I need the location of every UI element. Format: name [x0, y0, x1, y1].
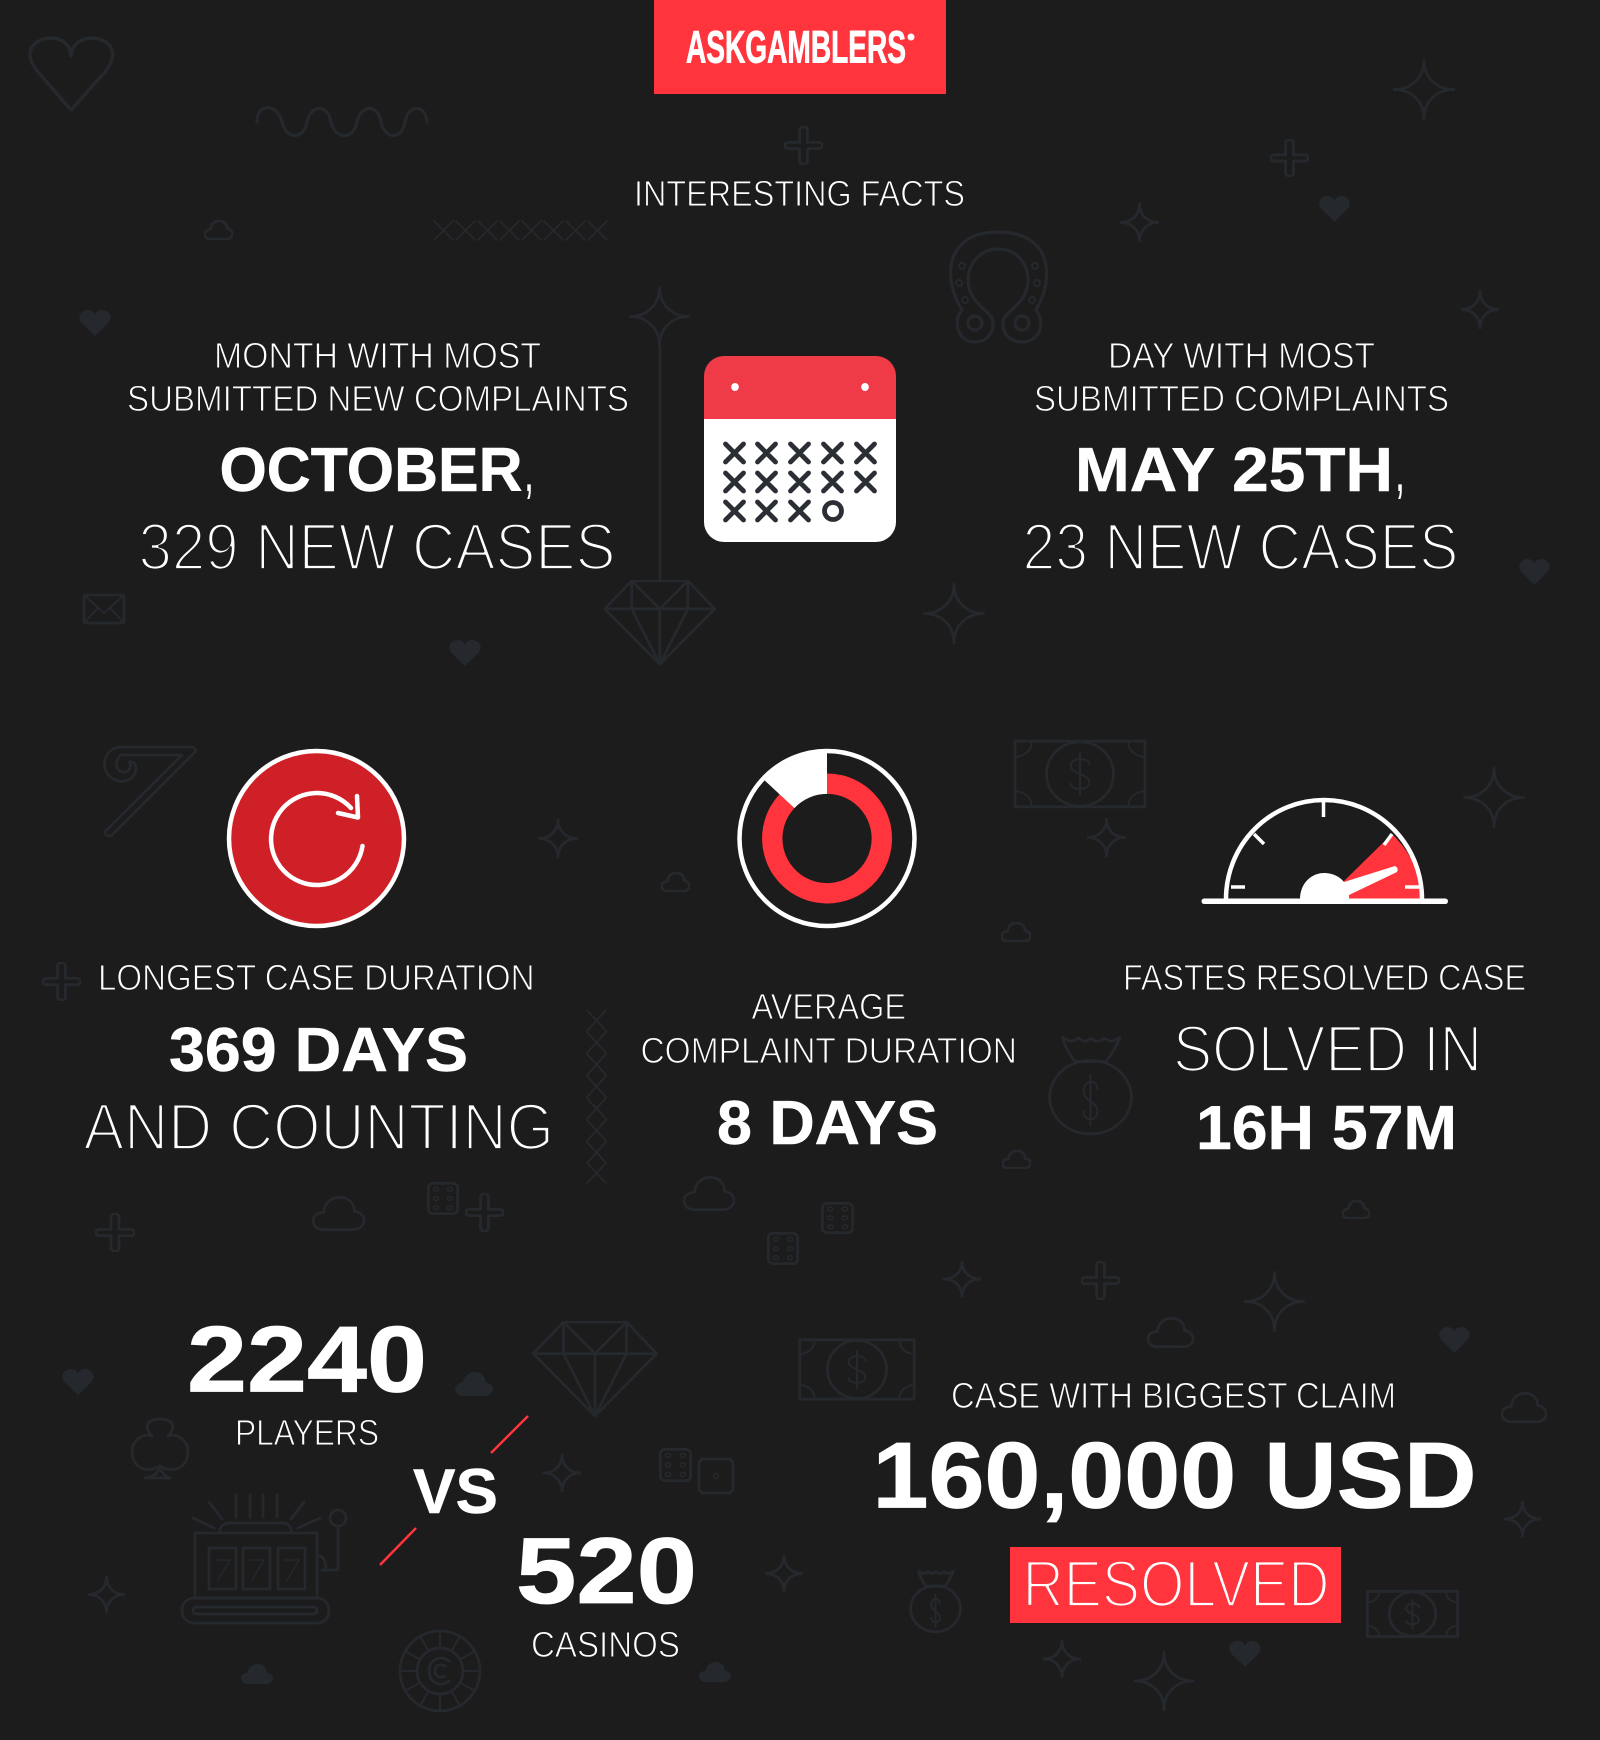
panel: average complaint duration: AVERAGE: [752, 986, 906, 1027]
panel: day with most complaints: SUBMITTED COMPLAINTS: [1034, 378, 1449, 419]
chart: average duration donut: [740, 751, 914, 926]
panel: players vs casinos: [187, 1306, 697, 1665]
panel: average complaint duration: [640, 986, 1017, 1158]
panel: case with biggest claim: [872, 1375, 1476, 1623]
panel: fastest resolved case: [1123, 957, 1526, 1163]
panel: month with most complaints: 329 NEW CASES: [138, 510, 616, 584]
panel: average complaint duration: 8 DAYS: [717, 1089, 938, 1158]
panel: longest case duration: 369 DAYS: [169, 1016, 468, 1085]
panel: case with biggest claim: RESOLVED: [1022, 1546, 1330, 1620]
panel: case with biggest claim: 160,000 USD: [872, 1422, 1476, 1528]
panel: longest case duration: [84, 957, 554, 1164]
panel: players vs casinos: 2240: [187, 1306, 427, 1412]
panel: players vs casinos: 520: [516, 1518, 697, 1623]
panel: average complaint duration: COMPLAINT DURATION: [640, 1030, 1017, 1071]
icon: speedometer gauge: [1202, 798, 1448, 904]
panel: fastest resolved case: 16H 57M: [1196, 1094, 1457, 1163]
panel: longest case duration: AND COUNTING: [84, 1090, 554, 1164]
panel: month with most complaints: MONTH WITH MOST: [214, 335, 541, 376]
icon: calendar: [704, 356, 896, 542]
panel: month with most complaints: [127, 335, 629, 584]
logo: AskGamblers: ASKGAMBLERS: [686, 22, 906, 72]
panel: players vs casinos: PLAYERS: [235, 1412, 379, 1453]
panel: day with most complaints: 23 NEW CASES: [1022, 510, 1458, 584]
panel: players vs casinos: CASINOS: [531, 1624, 680, 1665]
panel: fastest resolved case: FASTES RESOLVED CASE: [1123, 957, 1526, 998]
panel: day with most complaints: DAY WITH MOST: [1108, 335, 1375, 376]
title: INTERESTING FACTS: [634, 173, 965, 214]
panel: month with most complaints: SUBMITTED NEW COMPLAINTS: [127, 378, 629, 419]
icon: refresh circle: [229, 751, 404, 926]
panel: fastest resolved case: SOLVED IN: [1173, 1012, 1482, 1086]
panel: longest case duration: LONGEST CASE DURATION: [98, 957, 534, 998]
panel: case with biggest claim: CASE WITH BIGGEST CLAIM: [951, 1375, 1396, 1416]
panel: day with most complaints: MAY 25TH: [1075, 436, 1393, 505]
panel: players vs casinos: VS: [413, 1457, 498, 1527]
logo: AskGamblers: [654, 0, 946, 94]
panel: month with most complaints: ,: [524, 436, 534, 505]
panel: day with most complaints: [1022, 335, 1458, 584]
panel: day with most complaints: ,: [1395, 436, 1405, 505]
panel: month with most complaints: OCTOBER: [220, 436, 522, 505]
